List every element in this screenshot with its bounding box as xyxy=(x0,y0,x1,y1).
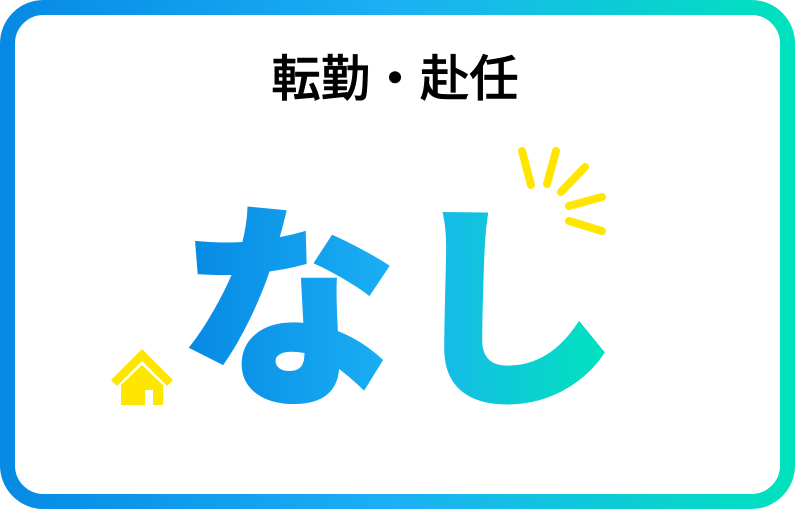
big text: none xyxy=(180,191,619,433)
icon: sparkle lines xyxy=(522,151,602,231)
icon: house xyxy=(111,349,173,405)
big text: none: な xyxy=(180,191,397,433)
big text: none: し xyxy=(402,191,619,433)
heading: 転勤・赴任 xyxy=(271,52,519,107)
